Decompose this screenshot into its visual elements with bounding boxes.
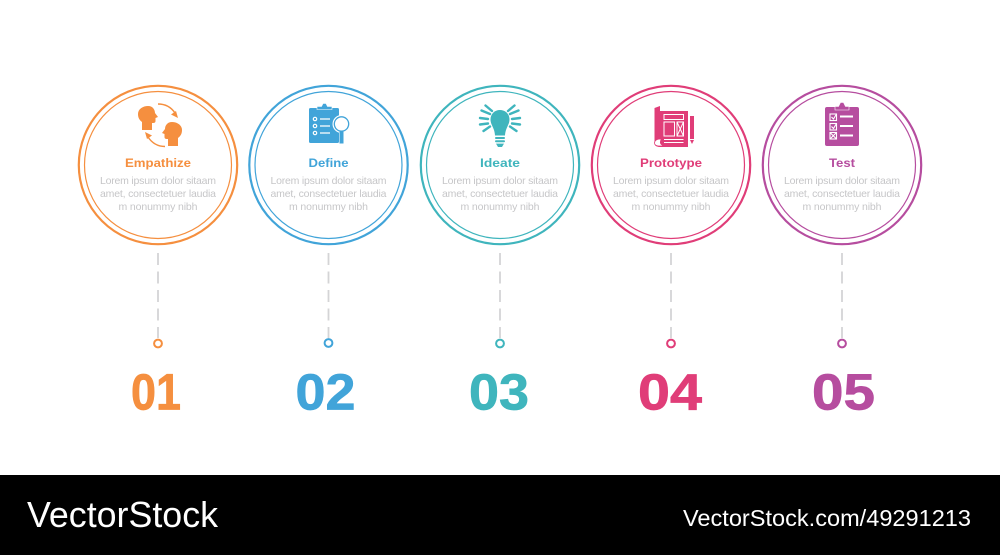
marker: step 3 dot [496,340,504,347]
circle: step 5 rings [763,86,921,244]
heading: Empathize: Empathize [125,156,191,170]
marker: step 5 dot [838,340,846,347]
connector: step 1 [157,253,159,338]
panel: step 4 Prototype [592,86,750,421]
text block: step 1 description: Lorem ipsum dolor sitaam [100,175,216,187]
text block: step 3 description [442,175,558,213]
connector: step 2 [328,253,330,338]
number: 03: 03 [469,364,529,420]
connector: step 3 [499,253,501,338]
circle: step 4 rings [592,86,750,244]
circle: step 3 rings [421,86,579,244]
panel: step 3 Ideate [421,86,579,421]
text block: step 4 description: amet, consectetuer laudia [613,188,729,200]
panel: step 1 Empathize [79,86,237,421]
text block: step 2 description: m nonummy nibh [289,201,368,213]
text block: step 5 description: m nonummy nibh [802,201,882,213]
icon: two heads with arrows [138,104,182,146]
number: 05: 05 [812,364,875,420]
footer reference: VectorStock.com/49291213: VectorStock.com/49291213 [683,505,971,531]
number: 01: 01 [131,364,181,420]
connector: step 5 [841,253,843,338]
text block: step 4 description: Lorem ipsum dolor sitaam [613,175,729,187]
number: 04: 04 [638,364,703,420]
footer logo: VectorStock: VectorStock [27,494,219,535]
number: 02: 02 [296,364,356,420]
text block: step 3 description: m nonummy nibh [460,201,540,213]
icon: clipboard with magnifier [309,104,350,144]
text block: step 2 description: Lorem ipsum dolor sitaam [270,175,387,187]
marker: step 2 dot [325,339,332,347]
panel: step 2 Define [249,86,408,421]
text block: step 3 description: amet, consectetuer laudia [442,188,558,200]
text block: step 5 description: Lorem ipsum dolor sitaam [784,175,900,187]
circle: step 1 rings [79,86,237,244]
marker: step 4 dot [667,340,675,347]
text block: step 1 description: m nonummy nibh [118,201,198,213]
footer bar [0,475,1000,555]
text block: step 5 description: amet, consectetuer laudia [784,188,900,200]
heading: Test: Test [829,156,855,170]
icon: blueprint and pencil [654,106,694,147]
text block: step 2 description: amet, consectetuer laudia [270,188,387,200]
icon: light bulb [480,106,520,147]
icon: checklist clipboard [825,102,859,146]
panel: step 5 Test [763,86,921,421]
connector: step 4 [670,253,672,338]
text block: step 2 description [270,175,387,213]
text block: step 5 description [784,175,900,213]
marker: step 1 dot [154,340,162,347]
text block: step 1 description: amet, consectetuer laudia [100,188,216,200]
text block: step 4 description: m nonummy nibh [632,201,711,213]
heading: Define: Define [308,156,349,170]
heading: Ideate: Ideate [480,156,520,170]
heading: Prototype: Prototype [640,156,702,170]
text block: step 4 description [613,175,729,213]
text block: step 3 description: Lorem ipsum dolor sitaam [442,175,558,187]
circle: step 2 rings [249,86,408,244]
text block: step 1 description [100,175,216,213]
